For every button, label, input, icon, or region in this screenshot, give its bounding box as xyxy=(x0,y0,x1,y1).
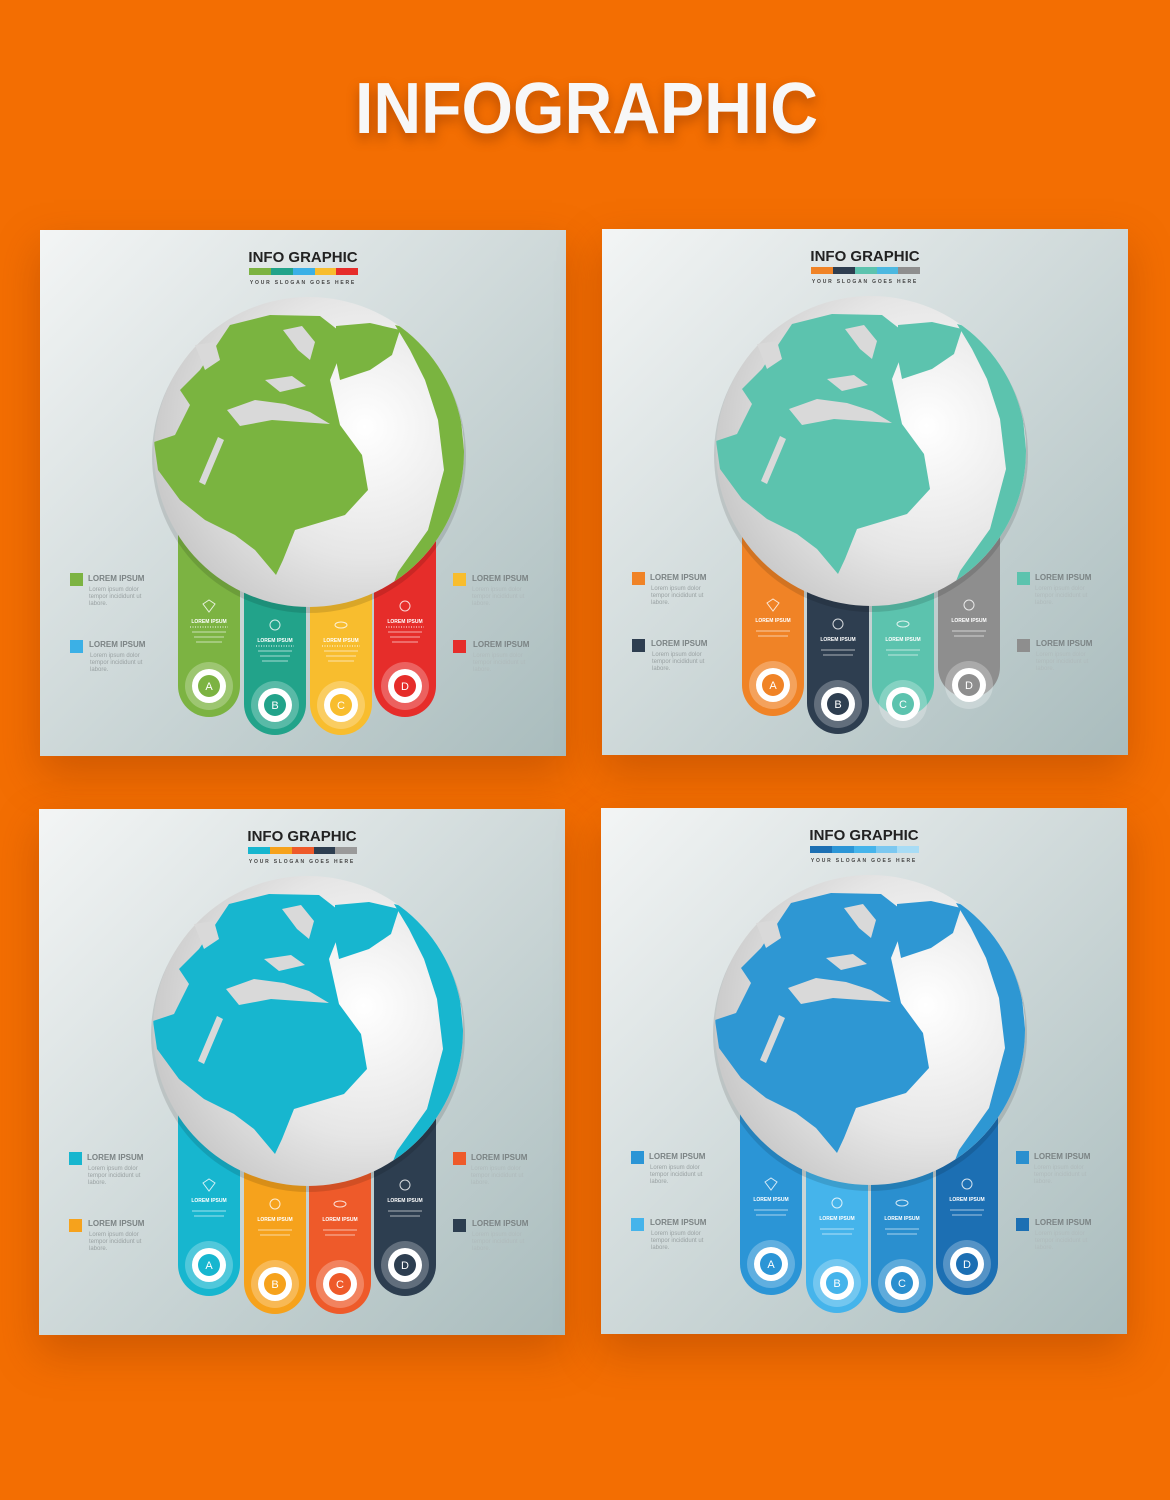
header: YOUR SLOGAN GOES HERE xyxy=(250,280,356,286)
legends: labore. xyxy=(90,667,109,673)
tabs: D xyxy=(965,680,973,692)
legends: Lorem ipsum dolor xyxy=(88,1166,138,1172)
legends: labore. xyxy=(88,1180,107,1186)
legends: LOREM IPSUM xyxy=(473,640,530,649)
legends: tempor incididunt ut xyxy=(472,1239,525,1245)
legends: tempor incididunt ut xyxy=(90,660,143,666)
legends: LOREM IPSUM xyxy=(87,1153,144,1162)
legends: tempor incididunt ut xyxy=(89,1239,142,1245)
legends: labore. xyxy=(472,601,491,607)
tabs: LOREM IPSUM xyxy=(191,619,227,625)
header: YOUR SLOGAN GOES HERE xyxy=(811,858,917,864)
tabs: LOREM IPSUM xyxy=(820,637,856,643)
header: YOUR SLOGAN GOES HERE xyxy=(249,859,355,865)
legends: tempor incididunt ut xyxy=(651,593,704,599)
tabs: B xyxy=(271,700,279,712)
tabs xyxy=(178,530,436,735)
legends xyxy=(70,573,530,673)
tabs: LOREM IPSUM xyxy=(949,1197,985,1203)
header xyxy=(810,248,920,285)
tabs: LOREM IPSUM xyxy=(257,638,293,644)
tabs: D xyxy=(401,681,409,693)
globe xyxy=(152,297,468,613)
tabs: B xyxy=(271,1279,279,1291)
legends: LOREM IPSUM xyxy=(651,639,708,648)
legends: Lorem ipsum dolor xyxy=(89,587,139,593)
tabs: LOREM IPSUM xyxy=(755,618,791,624)
legends: Lorem ipsum dolor xyxy=(1034,1165,1084,1171)
legends xyxy=(632,572,1093,672)
tabs xyxy=(740,1108,998,1313)
tabs: LOREM IPSUM xyxy=(322,1217,358,1223)
header: INFO GRAPHIC xyxy=(247,828,357,845)
tabs: B xyxy=(833,1278,841,1290)
legends: labore. xyxy=(1035,600,1054,606)
legends: labore. xyxy=(1035,1245,1054,1251)
panel: blue globe xyxy=(601,808,1127,1334)
globe xyxy=(713,875,1029,1191)
legends: LOREM IPSUM xyxy=(89,640,146,649)
legends: tempor incididunt ut xyxy=(1035,1238,1088,1244)
legends: tempor incididunt ut xyxy=(1034,1172,1087,1178)
tabs: LOREM IPSUM xyxy=(753,1197,789,1203)
legends: LOREM IPSUM xyxy=(650,1218,707,1227)
legends: LOREM IPSUM xyxy=(471,1153,528,1162)
legends: Lorem ipsum dolor xyxy=(1036,652,1086,658)
legends: labore. xyxy=(471,1180,490,1186)
tabs: B xyxy=(834,699,842,711)
legends: LOREM IPSUM xyxy=(88,1219,145,1228)
legends xyxy=(69,1152,529,1252)
tabs: A xyxy=(767,1259,775,1271)
tabs: LOREM IPSUM xyxy=(191,1198,227,1204)
legends: LOREM IPSUM xyxy=(1036,639,1093,648)
tabs: LOREM IPSUM xyxy=(884,1216,920,1222)
legends: labore. xyxy=(652,666,671,672)
legends: tempor incididunt ut xyxy=(651,1238,704,1244)
legends: labore. xyxy=(651,600,670,606)
legends: Lorem ipsum dolor xyxy=(90,653,140,659)
tabs: D xyxy=(401,1260,409,1272)
tabs: C xyxy=(898,1278,906,1290)
tabs: LOREM IPSUM xyxy=(323,638,359,644)
header xyxy=(248,249,358,286)
globe xyxy=(151,876,467,1192)
tabs: LOREM IPSUM xyxy=(257,1217,293,1223)
main title: INFOGRAPHIC xyxy=(355,69,818,149)
legends: Lorem ipsum dolor xyxy=(652,652,702,658)
tabs: A xyxy=(205,1260,213,1272)
legends: tempor incididunt ut xyxy=(88,1173,141,1179)
legends: labore. xyxy=(651,1245,670,1251)
legends: Lorem ipsum dolor xyxy=(472,587,522,593)
header: INFO GRAPHIC xyxy=(248,249,358,266)
legends: Lorem ipsum dolor xyxy=(1035,586,1085,592)
tabs: D xyxy=(963,1259,971,1271)
header xyxy=(809,827,919,864)
legends: tempor incididunt ut xyxy=(652,659,705,665)
legends: LOREM IPSUM xyxy=(650,573,707,582)
tabs: C xyxy=(336,1279,344,1291)
tabs: LOREM IPSUM xyxy=(387,1198,423,1204)
legends: labore. xyxy=(89,601,108,607)
legends: tempor incididunt ut xyxy=(471,1173,524,1179)
legends: LOREM IPSUM xyxy=(1035,573,1092,582)
legends: Lorem ipsum dolor xyxy=(1035,1231,1085,1237)
legends xyxy=(631,1151,1092,1251)
legends: labore. xyxy=(89,1246,108,1252)
header xyxy=(247,828,357,865)
tabs xyxy=(178,1109,436,1314)
legends: labore. xyxy=(1036,666,1055,672)
tabs: LOREM IPSUM xyxy=(951,618,987,624)
panel: green globe xyxy=(40,230,566,756)
legends: tempor incididunt ut xyxy=(1036,659,1089,665)
tabs: A xyxy=(769,680,777,692)
tabs: C xyxy=(899,699,907,711)
legends: Lorem ipsum dolor xyxy=(472,1232,522,1238)
legends: LOREM IPSUM xyxy=(88,574,145,583)
legends: Lorem ipsum dolor xyxy=(473,653,523,659)
globe xyxy=(714,296,1030,612)
legends: tempor incididunt ut xyxy=(89,594,142,600)
legends: labore. xyxy=(472,1246,491,1252)
legends: tempor incididunt ut xyxy=(473,660,526,666)
header: YOUR SLOGAN GOES HERE xyxy=(812,279,918,285)
legends: labore. xyxy=(650,1179,669,1185)
legends: LOREM IPSUM xyxy=(1035,1218,1092,1227)
legends: Lorem ipsum dolor xyxy=(651,586,701,592)
legends: Lorem ipsum dolor xyxy=(650,1165,700,1171)
tabs: A xyxy=(205,681,213,693)
legends: LOREM IPSUM xyxy=(472,1219,529,1228)
legends: labore. xyxy=(473,667,492,673)
legends: Lorem ipsum dolor xyxy=(89,1232,139,1238)
panel: cyan globe xyxy=(39,809,565,1335)
legends: tempor incididunt ut xyxy=(1035,593,1088,599)
legends: Lorem ipsum dolor xyxy=(651,1231,701,1237)
tabs: LOREM IPSUM xyxy=(819,1216,855,1222)
legends: Lorem ipsum dolor xyxy=(471,1166,521,1172)
tabs: LOREM IPSUM xyxy=(387,619,423,625)
header: INFO GRAPHIC xyxy=(809,827,919,844)
panel: teal globe xyxy=(602,229,1128,755)
legends: tempor incididunt ut xyxy=(650,1172,703,1178)
legends: LOREM IPSUM xyxy=(649,1152,706,1161)
tabs xyxy=(742,529,1000,734)
tabs: LOREM IPSUM xyxy=(885,637,921,643)
legends: LOREM IPSUM xyxy=(472,574,529,583)
legends: LOREM IPSUM xyxy=(1034,1152,1091,1161)
tabs: C xyxy=(337,700,345,712)
legends: labore. xyxy=(1034,1179,1053,1185)
header: INFO GRAPHIC xyxy=(810,248,920,265)
legends: tempor incididunt ut xyxy=(472,594,525,600)
